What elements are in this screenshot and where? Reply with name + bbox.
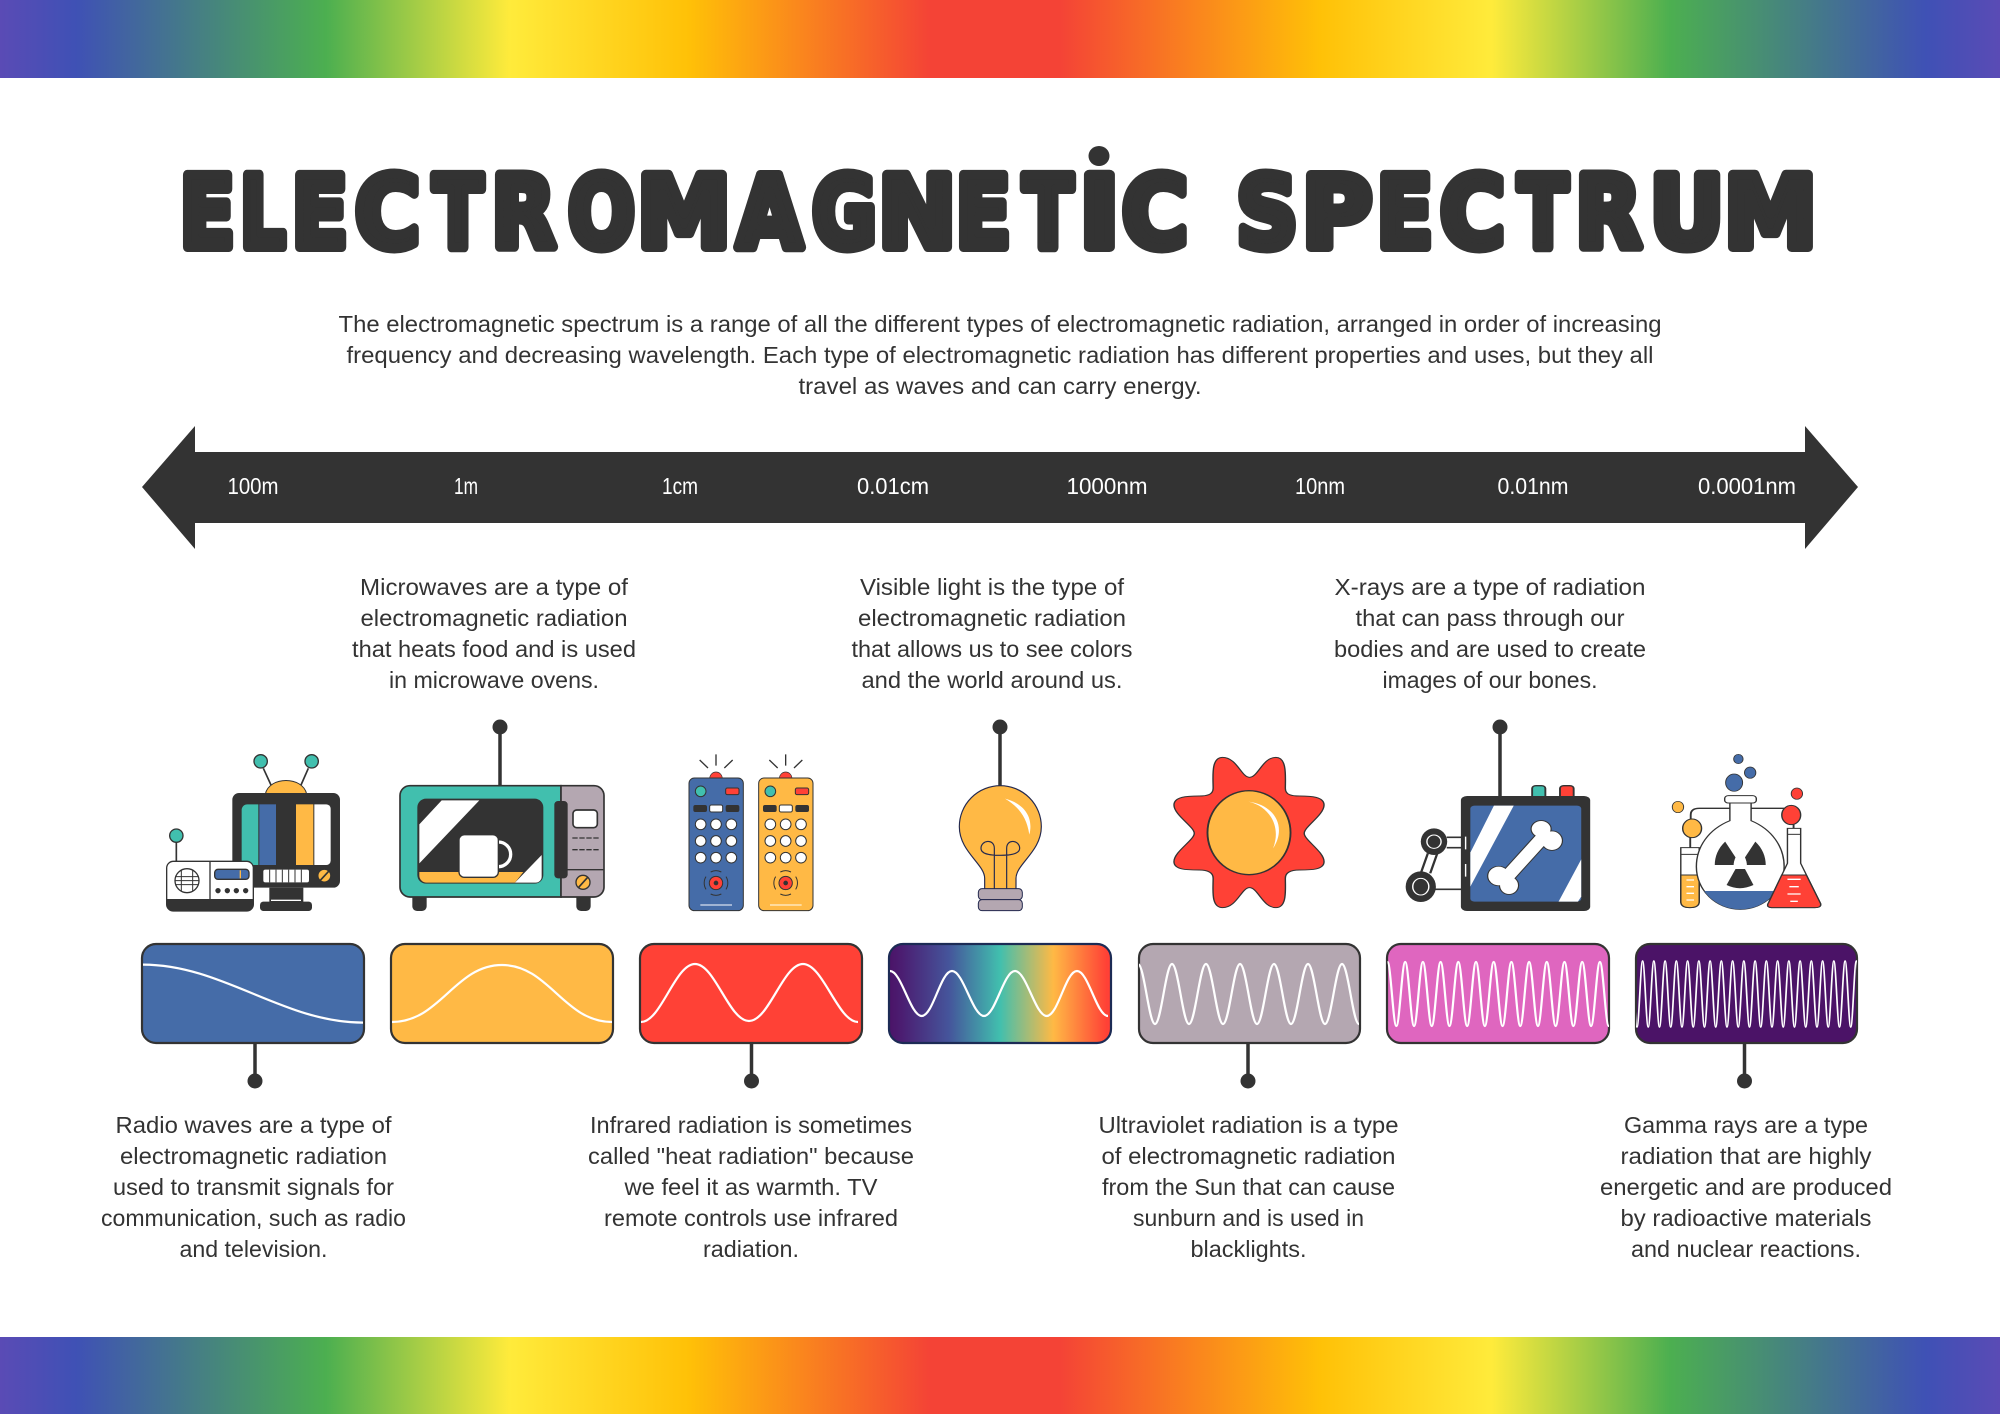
title: T: [433, 156, 483, 271]
connector: radio: [248, 1043, 262, 1088]
gamma rays description: radiation that are highly: [1620, 1143, 1872, 1169]
wavelength arrow with scale labels: 100m: [228, 473, 278, 499]
intro paragraph: travel as waves and can carry energy.: [798, 373, 1202, 399]
title: M: [637, 156, 731, 271]
title: U: [1650, 156, 1724, 271]
icon: microwave oven: [400, 786, 604, 911]
wave panel: x-ray: [1386, 942, 1610, 1044]
x-rays description: [1334, 574, 1646, 693]
connector: visible light: [992, 720, 1008, 786]
wavelength arrow with scale labels: 1cm: [662, 473, 698, 499]
title: C: [1440, 156, 1505, 271]
gamma rays description: energetic and are produced: [1600, 1174, 1892, 1200]
title: [180, 146, 1817, 271]
radio waves description: used to transmit signals for: [113, 1174, 394, 1200]
title: O: [568, 156, 635, 271]
icon: sun: [1174, 757, 1324, 908]
title: E: [1377, 156, 1433, 271]
visible light description: and the world around us.: [862, 667, 1122, 693]
title: E: [956, 156, 1011, 271]
wavelength arrow with scale labels: 1000nm: [1066, 473, 1148, 499]
visible light description: Visible light is the type of: [860, 574, 1124, 600]
x-rays description: bodies and are used to create: [1334, 636, 1646, 662]
title: C: [355, 156, 420, 271]
x-rays description: images of our bones.: [1382, 667, 1598, 693]
test tube: [1681, 848, 1699, 908]
title: L: [240, 156, 286, 271]
wave panel: infrared: [640, 944, 862, 1043]
bottom rainbow band: [0, 1337, 2000, 1414]
microwaves description: that heats food and is used: [352, 636, 636, 662]
title: G: [812, 156, 877, 271]
connector: microwaves: [492, 720, 508, 786]
title: E: [292, 156, 348, 271]
title: C: [1122, 156, 1188, 271]
title: T: [1518, 156, 1568, 271]
wavelength arrow with scale labels: 10nm: [1295, 473, 1345, 499]
wave panel: ultraviolet: [1138, 944, 1360, 1043]
infrared description: called "heat radiation" because: [588, 1143, 914, 1169]
visible light description: [852, 574, 1132, 693]
round flask: [1696, 796, 1784, 911]
gamma rays description: and nuclear reactions.: [1631, 1236, 1861, 1262]
wavelength arrow with scale labels: 0.0001nm: [1698, 473, 1796, 499]
icon: light bulb: [959, 786, 1041, 911]
connector: ultraviolet: [1240, 1043, 1256, 1088]
icon: radioactive lab flasks: [1672, 754, 1821, 911]
connector: gamma: [1737, 1043, 1752, 1088]
gamma rays description: [1600, 1112, 1892, 1262]
microwaves description: [352, 574, 636, 693]
gamma rays description: Gamma rays are a type: [1624, 1112, 1868, 1138]
infrared description: radiation.: [703, 1236, 799, 1262]
wave panel: gamma: [1631, 944, 1868, 1043]
microwaves description: in microwave ovens.: [389, 667, 599, 693]
microwaves description: electromagnetic radiation: [360, 605, 628, 631]
visible light description: electromagnetic radiation: [858, 605, 1126, 631]
title: R: [1575, 156, 1642, 271]
x-rays description: that can pass through our: [1356, 605, 1625, 631]
ultraviolet description: blacklights.: [1190, 1236, 1306, 1262]
radio waves description: and television.: [180, 1236, 328, 1262]
wavelength arrow with scale labels: 0.01cm: [857, 473, 929, 499]
icon: tv and radio: [167, 755, 340, 911]
ultraviolet description: of electromagnetic radiation: [1102, 1143, 1396, 1169]
title: N: [878, 156, 956, 271]
connector: infrared: [744, 1043, 759, 1088]
icon: x-ray machine: [1406, 786, 1590, 911]
wavelength arrow with scale labels: [142, 426, 1858, 549]
title: I: [1080, 156, 1119, 271]
wave panel: visible light: [889, 944, 1111, 1043]
visible light description: that allows us to see colors: [852, 636, 1132, 662]
title: M: [1724, 156, 1817, 271]
radio waves description: Radio waves are a type of: [116, 1112, 392, 1138]
title: T: [1023, 156, 1073, 271]
infrared description: [588, 1112, 914, 1262]
intro paragraph: [338, 311, 1662, 399]
infrared description: remote controls use infrared: [604, 1205, 898, 1231]
intro paragraph: The electromagnetic spectrum is a range of all the different types of electromagnetic radiation, arranged in order of increasing: [338, 311, 1662, 337]
conical flask: [1768, 828, 1821, 908]
wavelength arrow with scale labels: 0.01nm: [1498, 473, 1568, 499]
wave panel: radio: [142, 944, 364, 1043]
radio waves description: electromagnetic radiation: [120, 1143, 387, 1169]
ultraviolet description: Ultraviolet radiation is a type: [1098, 1112, 1398, 1138]
wavelength arrow with scale labels: 1m: [454, 473, 478, 499]
wave panel: microwave: [391, 944, 613, 1043]
gamma rays description: by radioactive materials: [1620, 1205, 1872, 1231]
radio waves description: communication, such as radio: [101, 1205, 406, 1231]
title: E: [180, 156, 235, 271]
title: A: [737, 156, 803, 271]
title: P: [1302, 156, 1372, 271]
ultraviolet description: from the Sun that can cause: [1102, 1174, 1395, 1200]
bone: [1488, 821, 1562, 894]
connector: x-rays: [1492, 720, 1508, 800]
infrared description: we feel it as warmth. TV: [623, 1174, 878, 1200]
yellow remote: [759, 754, 813, 911]
icon: remote controls: [689, 754, 813, 911]
ultraviolet description: [1098, 1112, 1398, 1262]
ultraviolet description: sunburn and is used in: [1133, 1205, 1364, 1231]
title: S: [1236, 156, 1298, 271]
x-rays description: X-rays are a type of radiation: [1334, 574, 1646, 600]
blue remote: [689, 754, 743, 911]
microwaves description: Microwaves are a type of: [360, 574, 628, 600]
infrared description: Infrared radiation is sometimes: [590, 1112, 912, 1138]
top rainbow band: [0, 0, 2000, 78]
radio waves description: [101, 1112, 406, 1262]
intro paragraph: frequency and decreasing wavelength. Each type of electromagnetic radiation has different properties and uses, but they all: [346, 342, 1654, 368]
title: R: [492, 156, 556, 271]
